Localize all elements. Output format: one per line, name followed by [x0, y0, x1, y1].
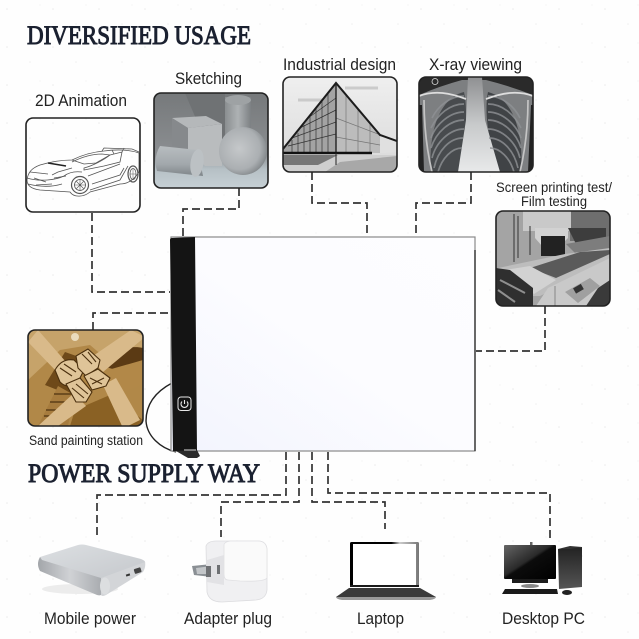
cable — [146, 383, 176, 452]
black control strip — [170, 237, 197, 451]
icon: desktop PC — [502, 542, 582, 595]
connector: 2D animation to panel — [92, 213, 170, 292]
connector: panel to adapter plug — [221, 452, 299, 537]
label: Mobile power: Mobile power — [44, 610, 136, 628]
image: chest x-ray — [419, 77, 533, 172]
icon: adapter plug — [192, 541, 267, 602]
icon: laptop — [336, 542, 436, 600]
label: Sketching: Sketching — [175, 70, 242, 88]
label: 2D Animation: 2D Animation — [35, 92, 127, 110]
label: Screen printing test / Film testing: Film testing — [521, 193, 587, 209]
image: screen printing machine — [496, 211, 610, 306]
panel: sketching — [154, 70, 268, 188]
label: Desktop PC: Desktop PC — [502, 610, 585, 628]
frame: industrial design — [283, 77, 397, 172]
frame: sketching — [154, 93, 268, 188]
right edge — [474, 250, 476, 451]
connector: panel to mobile power — [97, 452, 286, 538]
plug — [176, 450, 200, 458]
connector: screen printing to panel — [476, 306, 545, 351]
title: diversified usage: DIVERSIFIED USAGE — [27, 20, 251, 50]
icon: power button — [178, 397, 191, 410]
connector: panel to laptop — [312, 452, 385, 529]
label: X-ray viewing: X-ray viewing — [429, 56, 522, 74]
image: car line drawing — [27, 148, 139, 196]
central LED light pad — [146, 237, 475, 458]
panel: x-ray viewing — [419, 56, 533, 172]
label: Screen printing test / Film testing: Screen printing test/ — [496, 179, 612, 195]
label: Adapter plug: Adapter plug — [184, 610, 272, 628]
connector: panel to desktop PC — [328, 452, 550, 538]
image: sand painting hands — [28, 330, 145, 426]
frame: screen printing — [496, 211, 610, 306]
connector: industrial design to panel — [312, 172, 367, 237]
light surface — [171, 237, 475, 451]
icon: mobile power bank — [38, 544, 145, 596]
label: Industrial design: Industrial design — [283, 56, 396, 74]
label: Sand painting station: Sand painting station — [29, 433, 143, 448]
label: Laptop: Laptop — [357, 610, 404, 628]
title: power supply way: POWER SUPPLY WAY — [28, 458, 260, 488]
connector: sketching to panel — [183, 188, 239, 237]
panel: screen printing / film testing — [496, 179, 612, 306]
panel: 2D animation — [26, 92, 140, 212]
panel: industrial design — [283, 56, 397, 172]
frame: x-ray viewing — [419, 77, 533, 172]
connector: x-ray to panel — [416, 172, 471, 237]
image: plaster solids sketch — [154, 93, 268, 188]
frame: 2D animation — [26, 118, 140, 212]
connector: sand painting to panel — [93, 313, 171, 330]
panel: sand painting station — [28, 330, 145, 448]
frame: sand painting — [28, 330, 143, 426]
image: glass building sketch — [283, 77, 397, 172]
